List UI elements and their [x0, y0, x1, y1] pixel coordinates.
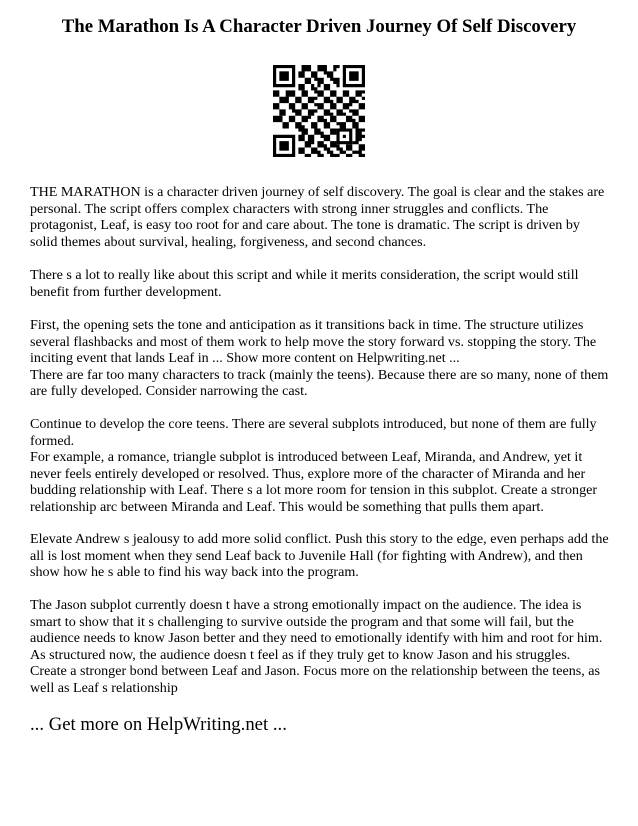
text block: intro: protagonist, Leaf, is easy too root for and care about. The tone is dramatic. The script is driven by — [30, 217, 580, 233]
text block: core teens: relationship arc between Miranda and Leaf. This would be something that pulls them apart. — [30, 498, 544, 514]
text block: intro — [30, 184, 604, 250]
text block: opening — [30, 317, 608, 399]
text block: intro: solid themes about survival, healing, forgiveness, and second chances. — [30, 234, 426, 250]
text block: Jason: The Jason subplot currently doesn t have a strong emotionally impact on the audience. The idea is — [30, 597, 581, 613]
call to action: ... Get more on HelpWriting.net ... — [30, 714, 287, 735]
text block: Jason: As structured now, the audience doesn t feel as if they truly get to know Jason and his struggles. — [30, 646, 570, 662]
text block: intro: THE MARATHON is a character driven journey of self discovery. The goal is clear and the stakes are — [30, 184, 604, 200]
text block: Jason: Create a stronger bond between Leaf and Jason. Focus more on the relationship between the teens, as — [30, 663, 600, 679]
text block: Andrew — [30, 531, 609, 580]
text block: Jason — [30, 597, 602, 696]
text block: opening: are fully developed. Consider narrowing the cast. — [30, 383, 308, 399]
text block: Andrew: Elevate Andrew s jealousy to add more solid conflict. Push this story to the edge, even perhaps add the — [30, 531, 609, 547]
text block: intro: personal. The script offers complex characters with strong inner struggles and conflicts. The — [30, 200, 548, 216]
text block: opening: several flashbacks and most of them work to help move the story forward vs. stopping the story. The — [30, 334, 596, 350]
text block: core teens: formed. — [30, 432, 74, 448]
text block: core teens: For example, a romance, triangle subplot is introduced between Leaf, Miranda, and Andrew, yet it — [30, 449, 582, 465]
text block: consideration: benefit from further development. — [30, 284, 222, 300]
text block: opening: First, the opening sets the tone and anticipation as it transitions back in time. The structure utilizes — [30, 317, 583, 333]
text block: Jason: audience needs to know Jason better and they need to emotionally identify with him and root for him. — [30, 630, 602, 646]
text block: core teens — [30, 416, 597, 514]
text block: consideration: There s a lot to really like about this script and while it merits consideration, the script would still — [30, 267, 579, 283]
text block: consideration — [30, 267, 579, 300]
text block: Andrew: show how he s able to find his way back into the program. — [30, 564, 359, 580]
text block: core teens: budding relationship with Leaf. There s a lot more room for tension in this subplot. Create a stronger — [30, 482, 597, 498]
text block: Andrew: all is lost moment when they send Leaf back to Juvenile Hall (for fighting with Andrew), and then — [30, 548, 583, 564]
title: The Marathon Is A Character Driven Journey Of Self Discovery — [62, 16, 576, 37]
text block: core teens: Continue to develop the core teens. There are several subplots introduced, but none of them are fully — [30, 416, 597, 432]
text block: core teens: never feels entirely developed or resolved. Thus, explore more of the character of Miranda and her — [30, 466, 585, 482]
icon: QR code — [273, 65, 365, 157]
text block: opening: There are far too many characters to track (mainly the teens). Because there are so many, none of them — [30, 366, 608, 382]
text block: Jason: well as Leaf s relationship — [30, 680, 178, 696]
text block: Jason: smart to show that it s challenging to survive outside the program and that some will fail, but the — [30, 614, 574, 630]
text block: opening: inciting event that lands Leaf in ... Show more content on Helpwriting.net ... — [30, 350, 460, 366]
